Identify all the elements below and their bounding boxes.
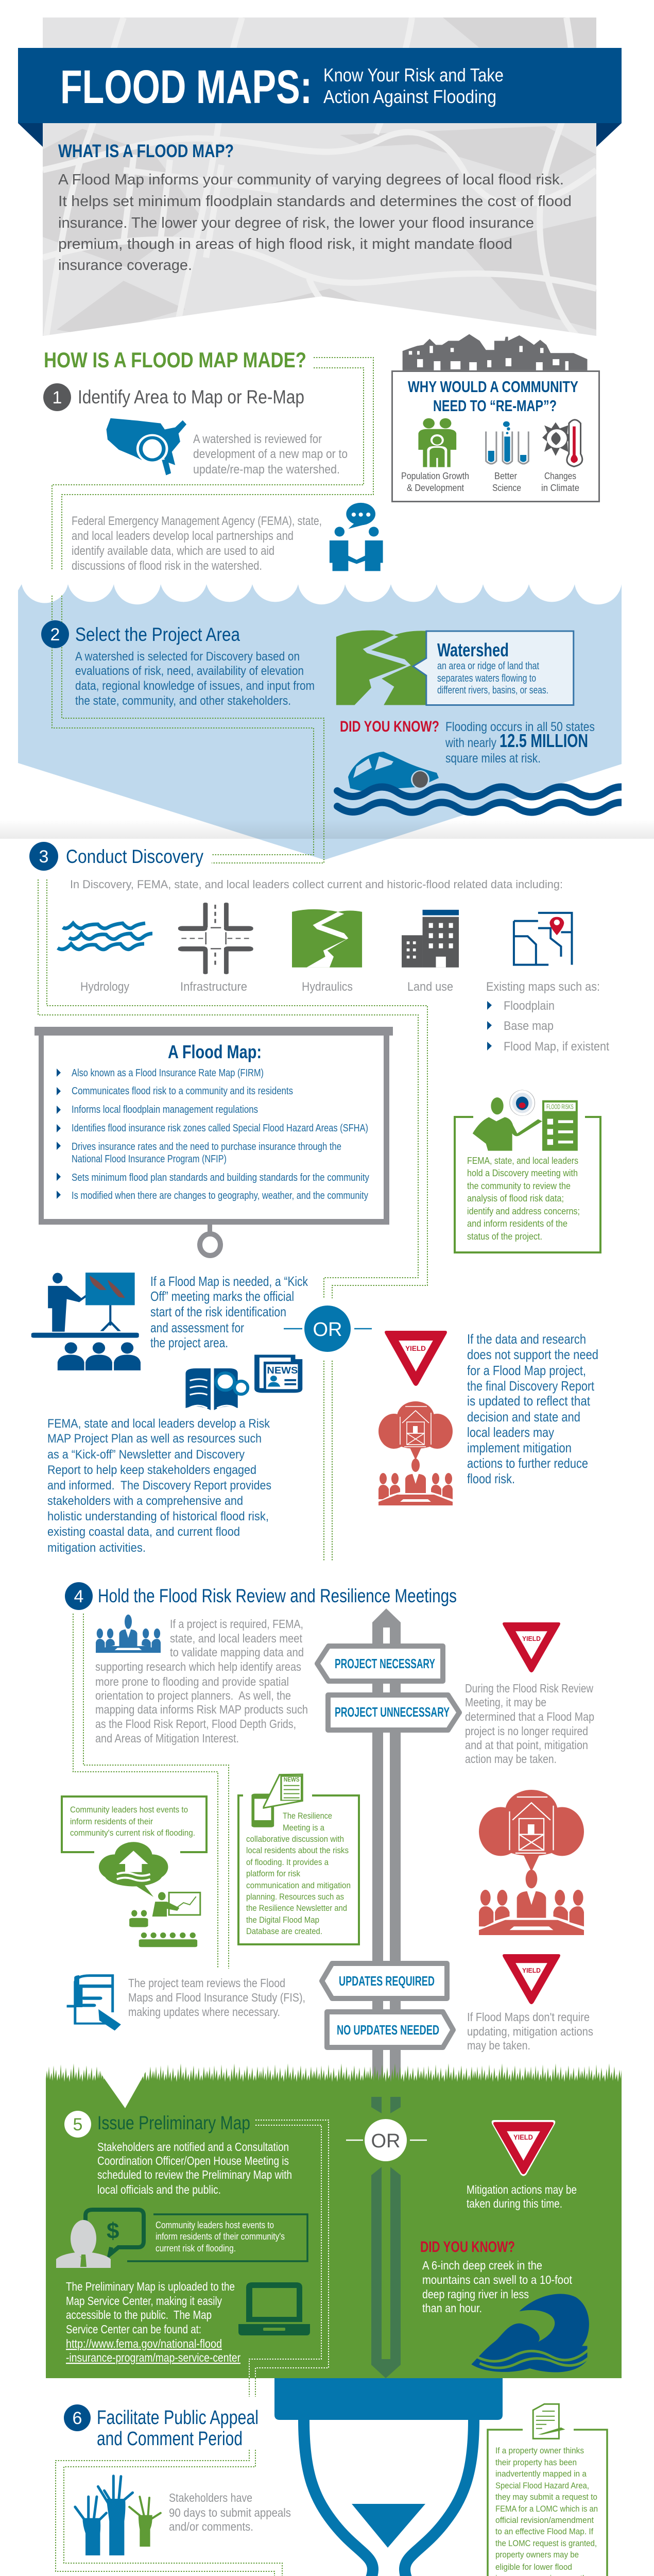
panel: community leaders host events [62, 1797, 206, 1947]
or divider [346, 2119, 427, 2161]
existing maps list: Flood Map, if existent [504, 1040, 609, 1054]
step 6 heading [97, 2407, 259, 2450]
existing maps list: Existing maps such as: [486, 980, 600, 994]
no updates text: may be taken. [467, 2039, 530, 2052]
step 5 text: scheduled to review the Preliminary Map with [97, 2168, 292, 2181]
step 4 text: state, and local leaders meet [170, 1632, 303, 1645]
icon: yield sign: YIELD [405, 1344, 426, 1352]
preliminary map uploaded text: -insurance-program/map-service-center [66, 2351, 240, 2364]
icon: houses silhouette [403, 334, 587, 370]
kick off text: start of the risk identification [150, 1304, 286, 1319]
step 5 text [97, 2140, 292, 2196]
icon: newsletter: NEWS [267, 1365, 298, 1376]
step 4 text: to validate mapping data and [170, 1646, 304, 1659]
intro paragraph: insurance coverage. [58, 257, 192, 274]
step 1 text: watershed reviewed: development of a new map or to [193, 447, 348, 461]
updates text: Maps and Flood Insurance Study (FIS), [128, 1991, 305, 2004]
step 4 text: supporting research which help identify areas [95, 1660, 301, 1673]
sign: updates required [322, 1963, 447, 1998]
appeals text: and/or comments. [169, 2520, 253, 2533]
panel: LOMC property owner: FEMA for a LOMC which is an [495, 2504, 598, 2514]
no project text: for a Flood Map project, [467, 1363, 586, 1378]
no longer required text [465, 1682, 594, 1766]
icon: test tubes [486, 421, 528, 464]
step 2 heading: Select the Project Area [75, 624, 240, 645]
step 4 text: mapping data informs Risk MAP products such [95, 1703, 308, 1716]
step 6 badge [64, 2404, 91, 2431]
how is a flood map made heading: HOW IS A FLOOD MAP MADE? [44, 348, 306, 372]
panel: LOMC property owner: their property has been [495, 2458, 577, 2467]
risk map project plan text: FEMA, state and local leaders develop a Risk [47, 1417, 270, 1431]
step 6 heading: and Comment Period [97, 2428, 243, 2450]
panel: resilience meeting: planning. Resources such as [246, 1892, 344, 1902]
step 4 text: If a project is required, FEMA, [170, 1617, 303, 1631]
why heading: WHY WOULD A COMMUNITY [408, 378, 578, 396]
preliminary map uploaded text: The Preliminary Map is uploaded to the [66, 2280, 235, 2293]
icon: newsletter [254, 1354, 302, 1393]
intro paragraph: premium, though in areas of high flood risk, it might mandate flood [58, 236, 512, 252]
data type labels [80, 980, 453, 994]
did you know: creek: deep raging river in less [422, 2287, 529, 2301]
panel: community leaders host events: Community leaders host events to [70, 1805, 188, 1815]
remap labels: Better [494, 471, 517, 481]
icon: sun and thermometer [542, 420, 582, 466]
risk map project plan text: holistic understanding of historical flood risk, [47, 1510, 269, 1523]
sign: project unnecessary [328, 1695, 459, 1730]
watershed definition [437, 660, 548, 696]
step 4 text [95, 1617, 308, 1745]
screen heading: A Flood Map: [168, 1041, 262, 1062]
icon: US map with magnifier [107, 418, 186, 475]
no project text: is updated to reflect that [467, 1393, 591, 1409]
screen bullet text: Sets minimum flood plan standards and building standards for the community [72, 1172, 369, 1183]
icon: raised hands [75, 2476, 161, 2555]
icon: yield sign: YIELD [522, 1967, 541, 1974]
did you know: creek [420, 2239, 573, 2315]
remap labels: & Development [407, 483, 464, 493]
icon: land use [402, 910, 459, 968]
watershed callout [336, 630, 574, 705]
remap labels: Changes [544, 471, 576, 481]
icon: family [418, 418, 456, 467]
icon: yield sign [503, 1622, 560, 1672]
step 2 text: A watershed is selected for Discovery based on [75, 650, 300, 664]
community leaders box: current risk of flooding. [156, 2243, 236, 2253]
step 4 text: orientation to project planners. As well, the [95, 1689, 291, 1702]
step 2 text: evaluations of risk, need, availability of elevation [75, 664, 304, 678]
step 4 heading: Hold the Flood Risk Review and Resilience Meetings [98, 1585, 457, 1606]
panel: discovery meeting: FLOOD RISKS [546, 1104, 574, 1111]
panel: LOMC property owner: to an effective Flood Map. If [495, 2527, 593, 2536]
sign: no updates needed: NO UPDATES NEEDED [337, 2022, 439, 2038]
step 4 text: more prone to flooding and provide spatial [95, 1675, 289, 1688]
did you know: creek: DID YOU KNOW? [420, 2239, 515, 2256]
step 1 badge: 1 [53, 388, 62, 408]
screen bullet text: Identifies flood insurance risk zones called Special Flood Hazard Areas (SFHA) [72, 1123, 368, 1134]
or divider: OR [313, 1319, 342, 1341]
risk map project plan text: and informed. The Discovery Report provides [47, 1479, 271, 1493]
what is a flood map heading: WHAT IS A FLOOD MAP? [58, 141, 234, 161]
icon: red cloud over meeting [378, 1401, 453, 1505]
subtitle: Action Against Flooding [323, 86, 496, 107]
step 1 text: watershed reviewed: A watershed is reviewed for [193, 432, 322, 446]
panel: resilience meeting: the Digital Flood Map [246, 1915, 319, 1925]
remap labels [401, 471, 579, 493]
main title: FLOOD MAPS: [60, 61, 312, 113]
panel: resilience meeting: platform for risk [246, 1869, 300, 1878]
mitigation text: taken during this time. [467, 2197, 562, 2210]
or divider [284, 1306, 372, 1352]
screen bullet text: Communicates flood risk to a community and its residents [72, 1086, 293, 1097]
did you know: 50 states: Flooding occurs in all 50 states [445, 720, 595, 734]
icon: hydrology [58, 923, 152, 950]
did you know: 50 states [340, 718, 595, 766]
icon: hydraulics [292, 909, 362, 968]
icon: infrastructure [178, 903, 253, 974]
why heading: NEED TO “RE-MAP”? [433, 397, 557, 415]
icon: dark green laptop [238, 2282, 310, 2335]
or divider: OR [371, 2130, 401, 2152]
data type labels: Hydraulics [302, 980, 353, 994]
step 1 heading: Identify Area to Map or Re-Map [78, 386, 304, 408]
community leaders box: inform residents of their community's [156, 2231, 285, 2242]
discovery meeting text: status of the project. [467, 1231, 542, 1242]
screen bullet text: Also known as a Flood Insurance Rate Map (FIRM) [72, 1067, 264, 1079]
remap labels: Science [492, 483, 521, 493]
icon: presenter and audience [31, 1273, 141, 1370]
step 2 badge: 2 [50, 625, 60, 645]
icon: car in flood waves [337, 752, 636, 812]
step 3 intro text: In Discovery, FEMA, state, and local leaders collect current and historic-flood related data including: [70, 878, 563, 891]
no project text: the final Discovery Report [467, 1378, 595, 1394]
panel: LOMC property owner: official revision/amendment [495, 2515, 594, 2525]
icon: report and glasses [185, 1368, 248, 1410]
step 1 text: watershed reviewed: update/re-map the watershed. [193, 463, 340, 477]
header map background [43, 18, 596, 336]
sign: project necessary [317, 1646, 443, 1681]
no project text: implement mitigation [467, 1440, 572, 1455]
step 5 heading: Issue Preliminary Map [97, 2112, 250, 2133]
no longer required text: Meeting, it may be [465, 1696, 546, 1709]
panel: discovery meeting [455, 1090, 600, 1252]
panel: issue preliminary map with grass [46, 2061, 622, 2378]
appeals text: Stakeholders have [169, 2491, 252, 2504]
data type labels: Infrastructure [180, 980, 247, 994]
intro paragraph: It helps set minimum floodplain standards and determines the cost of flood [58, 193, 572, 210]
step 5 text: Stakeholders are notified and a Consultation [97, 2140, 289, 2154]
panel: resilience meeting: the Resilience Newsletter and [246, 1903, 347, 1913]
watershed term: Watershed [437, 639, 509, 660]
panel: LOMC property owner: inadvertently mapped in a [495, 2469, 587, 2479]
risk map project plan text: existing coastal data, and current flood [47, 1525, 240, 1539]
discovery meeting text: hold a Discovery meeting with [467, 1168, 578, 1178]
panel: community leaders host events: community's current risk of flooding. [70, 1828, 195, 1838]
icon: river through green land [336, 630, 429, 705]
kick off text: the project area. [150, 1335, 228, 1350]
risk map project plan text: as a “Kick-off” Newsletter and Discovery [47, 1448, 245, 1462]
appeals text: 90 days to submit appeals [169, 2506, 291, 2519]
panel: LOMC property owner: eligible for lower flood [495, 2562, 572, 2572]
kick off text: Off” meeting marks the official [150, 1289, 294, 1304]
step 4 badge [65, 1582, 93, 1610]
step 1 text: partnerships: and local leaders develop local partnerships and [72, 529, 294, 543]
step 1 text: partnerships: discussions of flood risk in the watershed. [72, 559, 262, 573]
icon: presenter with seal and flood risk board [473, 1090, 578, 1151]
risk map project plan text: Report to help keep stakeholders engaged [47, 1463, 256, 1477]
no longer required text: project is no longer required [465, 1724, 588, 1738]
step 3 heading: Conduct Discovery [66, 846, 203, 867]
existing maps list: Base map [504, 1019, 554, 1033]
icon: yield sign: YIELD [513, 2133, 533, 2141]
intro paragraph [58, 172, 572, 274]
panel: resilience meeting: communication and mitigation [246, 1880, 351, 1890]
existing maps list [486, 980, 609, 1054]
step 5 badge [64, 2111, 91, 2138]
preliminary map uploaded text: http://www.fema.gov/national-flood [66, 2337, 222, 2350]
no updates text: updating, mitigation actions [467, 2025, 593, 2038]
screen bullet text: Is modified when there are changes to geography, weather, and the community [72, 1190, 368, 1201]
did you know: creek: mountains can swell to a 10-foot [422, 2273, 573, 2286]
icon: person with dollar speech bubble [56, 2210, 144, 2268]
watershed definition: different rivers, basins, or seas. [437, 685, 548, 696]
step 4 badge: 4 [74, 1587, 83, 1606]
step 5 text: local officials and the public. [97, 2183, 221, 2196]
did you know: creek: than an hour. [422, 2301, 482, 2315]
step 4 text: as the Flood Risk Report, Flood Depth Grids, [95, 1717, 296, 1731]
mitigation text [467, 2183, 577, 2210]
data type labels: Land use [407, 980, 453, 994]
icon: person with dollar speech bubble: $ [107, 2218, 119, 2244]
step 1 text: partnerships: identify available data, which are used to aid [72, 544, 274, 558]
icon: flood cloud and presenter [99, 1842, 200, 1947]
panel: resilience meeting: collaborative discussion with [246, 1834, 344, 1844]
no project text [467, 1331, 598, 1486]
no project text: decision and state and [467, 1409, 580, 1425]
discovery meeting text [467, 1156, 580, 1242]
panel: resilience meeting: The Resilience [283, 1811, 332, 1821]
icon: phone and newsletter: NEWS [284, 1776, 300, 1783]
icon: blue meeting [96, 1615, 161, 1653]
sign: no updates needed [327, 2012, 453, 2047]
updates text: making updates where necessary. [128, 2005, 280, 2019]
community leaders box [127, 2214, 307, 2261]
panel: LOMC property owner: the LOMC request is granted, [495, 2538, 597, 2548]
preliminary map uploaded text: Map Service Center, making it easily [66, 2294, 222, 2308]
kick off text: If a Flood Map is needed, a “Kick [150, 1274, 308, 1289]
hourglass [274, 2378, 503, 2576]
panel: select the project area background [18, 584, 622, 860]
appeals text [169, 2491, 291, 2533]
preliminary map uploaded text [66, 2280, 240, 2364]
no longer required text: determined that a Flood Map [465, 1710, 594, 1723]
discovery meeting text: analysis of flood risk data; [467, 1193, 564, 1204]
updates text: The project team reviews the Flood [128, 1976, 285, 1990]
remap labels: in Climate [541, 483, 579, 493]
icon: red cloud over meeting [479, 1790, 584, 1935]
icon: yield sign: YIELD [522, 1635, 541, 1642]
step 2 text [75, 650, 315, 708]
step 6 badge: 6 [73, 2409, 82, 2428]
panel: community leaders host events: inform residents of their [70, 1817, 153, 1826]
step 1 text: partnerships [72, 514, 322, 573]
no updates text: If Flood Maps don't require [467, 2010, 590, 2024]
step 4 text: and Areas of Mitigation Interest. [95, 1732, 239, 1745]
risk map project plan text: mitigation activities. [47, 1541, 146, 1555]
icon: existing map with pin [514, 913, 572, 965]
sign post [317, 1608, 459, 2092]
did you know: 50 states: DID YOU KNOW? [340, 718, 439, 735]
icon: phone and newsletter [251, 1774, 302, 1827]
panel: resilience meeting: Meeting is a [283, 1823, 324, 1833]
panel: why would a community need to re-map [392, 334, 599, 502]
panel: resilience meeting [238, 1774, 359, 1944]
no longer required text: and at that point, mitigation [465, 1738, 588, 1752]
no project text: flood risk. [467, 1471, 515, 1486]
no updates text [467, 2010, 593, 2052]
screen bullet text: Drives insurance rates and the need to purchase insurance through the [72, 1141, 341, 1153]
discovery meeting text: the community to review the [467, 1181, 571, 1191]
step 2 text: data, regional knowledge of issues, and input from [75, 679, 315, 693]
panel: LOMC property owner: they may submit a request to [495, 2492, 597, 2502]
screen bullet text: National Flood Insurance Program (NFIP) [72, 1154, 227, 1165]
sign: updates required: UPDATES REQUIRED [339, 1973, 435, 1989]
did you know: 50 states: with nearly [445, 736, 496, 750]
step 2 badge [41, 620, 69, 648]
panel: LOMC property owner: If a property owner thinks [495, 2446, 584, 2455]
icon: yield sign [503, 1954, 560, 2004]
risk map project plan text: stakeholders with a comprehensive and [47, 1494, 243, 1508]
sign: project necessary: PROJECT NECESSARY [335, 1656, 435, 1671]
step 5 badge: 5 [73, 2115, 82, 2134]
no project text: local leaders may [467, 1425, 554, 1440]
step 2 text: the state, community, and other stakeholders. [75, 694, 291, 708]
screen bullet text: Informs local floodplain management regulations [72, 1104, 258, 1115]
intro paragraph: A Flood Map informs your community of varying degrees of local flood risk. [58, 172, 564, 188]
watershed definition: an area or ridge of land that [437, 660, 539, 672]
discovery meeting text: FEMA, state, and local leaders [467, 1156, 578, 1166]
mitigation text: Mitigation actions may be [467, 2183, 577, 2196]
step 3 badge [29, 842, 58, 871]
no longer required text: During the Flood Risk Review [465, 1682, 593, 1695]
no project text: If the data and research [467, 1331, 586, 1347]
risk map project plan text [47, 1417, 271, 1555]
no project text: actions to further reduce [467, 1455, 588, 1471]
panel: LOMC property owner [488, 2404, 607, 2576]
watershed definition: separates waters flowing to [437, 673, 536, 684]
no project text: does not support the need [467, 1347, 598, 1362]
icon: yield sign [385, 1331, 447, 1386]
intro paragraph: insurance. The lower your degree of risk, the lower your flood insurance [58, 215, 534, 231]
panel: LOMC property owner: Special Flood Hazard Area, [495, 2481, 589, 2490]
did you know: creek: A 6-inch deep creek in the [422, 2259, 542, 2272]
panel: resilience meeting: Database are created. [246, 1926, 322, 1936]
panel: resilience meeting: local residents about the risks [246, 1845, 349, 1855]
preliminary map uploaded text: Service Center can be found at: [66, 2323, 201, 2336]
existing maps list: Floodplain [504, 999, 555, 1013]
panel: a flood map projector screen [35, 1027, 393, 1256]
subtitle [323, 64, 504, 107]
icon: two people talking [330, 503, 383, 571]
icon: scroll and pen [67, 1975, 121, 2030]
step 1 text: partnerships: Federal Emergency Management Agency (FEMA), state, [72, 514, 322, 528]
preliminary map uploaded text: accessible to the public. The Map [66, 2308, 212, 2321]
discovery meeting text: identify and address concerns; [467, 1206, 580, 1216]
panel: resilience meeting: of flooding. It provides a [246, 1857, 329, 1867]
screen bullet markers [57, 1069, 61, 1199]
did you know: 50 states: 12.5 MILLION [500, 730, 588, 751]
step 3 badge: 3 [39, 847, 48, 867]
discovery meeting text: and inform residents of the [467, 1218, 567, 1229]
updates text [128, 1976, 305, 2019]
icon: signed document [533, 2404, 565, 2438]
screen bullet text [72, 1067, 369, 1201]
subtitle: Know Your Risk and Take [323, 64, 504, 86]
step 6 heading: Facilitate Public Appeal [97, 2407, 259, 2429]
panel: LOMC property owner: property owners may be [495, 2550, 579, 2560]
step 1 text: watershed reviewed [193, 432, 348, 477]
why heading [408, 378, 578, 415]
step 5 text: Coordination Officer/Open House Meeting is [97, 2154, 289, 2167]
post in green panel [371, 2097, 401, 2378]
icon: yield sign [492, 2120, 555, 2176]
step 1 badge [43, 383, 71, 411]
data type labels: Hydrology [80, 980, 129, 994]
community leaders box: Community leaders host events to [156, 2220, 274, 2230]
title banner [18, 48, 622, 147]
remap labels: Population Growth [401, 471, 469, 481]
sign: project unnecessary: PROJECT UNNECESSARY [335, 1704, 450, 1720]
kick off text [150, 1274, 308, 1350]
kick off text: and assessment for [150, 1320, 244, 1335]
no longer required text: action may be taken. [465, 1752, 557, 1766]
did you know: 50 states: square miles at risk. [445, 751, 541, 766]
risk map project plan text: MAP Project Plan as well as resources such [47, 1432, 262, 1446]
icon: big wave [471, 2294, 589, 2372]
